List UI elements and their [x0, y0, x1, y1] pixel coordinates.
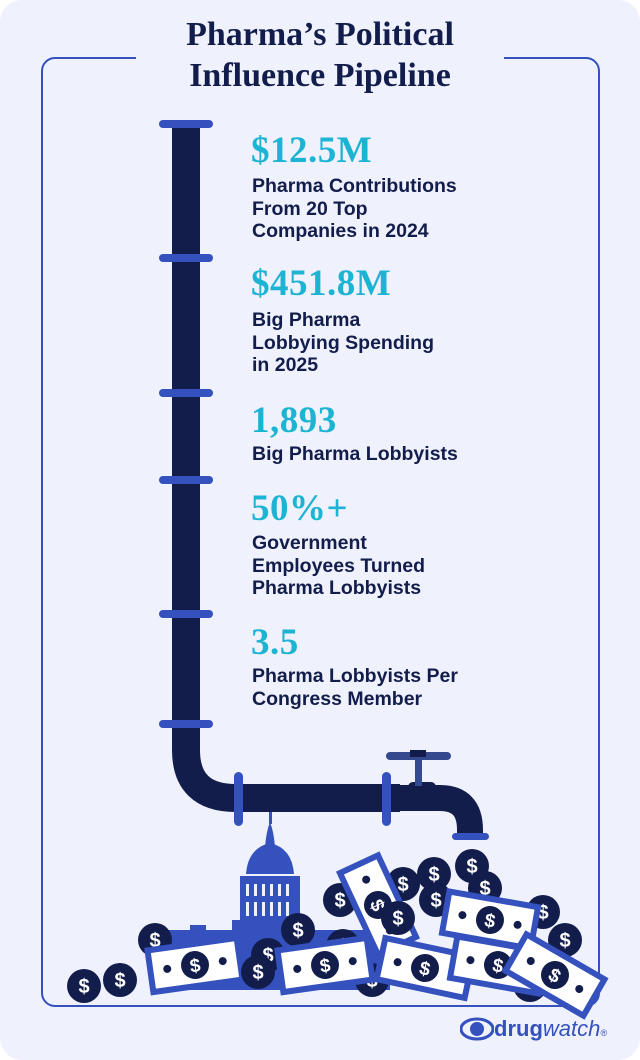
money pile: [67, 849, 609, 1020]
text: Pharma Contributions: [252, 175, 457, 197]
text: $451.8M: [251, 263, 391, 304]
text: Congress Member: [252, 688, 422, 710]
text: Big Pharma: [252, 309, 360, 331]
text: Pharma Lobbyists Per: [252, 665, 458, 687]
text: Companies in 2024: [252, 220, 429, 242]
text: Lobbying Spending: [252, 332, 434, 354]
text: $12.5M: [251, 130, 372, 171]
stat 3: [251, 400, 458, 465]
text: Employees Turned: [252, 554, 425, 576]
text: Big Pharma Lobbyists: [252, 443, 458, 465]
title: Influence Pipeline: [189, 57, 451, 94]
pipe: [159, 120, 489, 840]
title: [136, 14, 504, 96]
capitol: [150, 812, 390, 990]
title: Pharma’s Political: [186, 16, 454, 53]
logo: drugwatch®: [494, 1016, 607, 1041]
text: Pharma Lobbyists: [252, 577, 421, 599]
text: From 20 Top: [252, 198, 368, 220]
text: 50%+: [251, 488, 348, 529]
stat 2: [251, 263, 434, 376]
stat 1: [251, 130, 457, 242]
text: Government: [252, 532, 367, 554]
text: 1,893: [251, 400, 337, 441]
stat 5: [251, 622, 458, 710]
text: 3.5: [251, 622, 299, 663]
stat 4: [251, 488, 425, 599]
frame border: [41, 57, 600, 1007]
text: in 2025: [252, 354, 318, 376]
